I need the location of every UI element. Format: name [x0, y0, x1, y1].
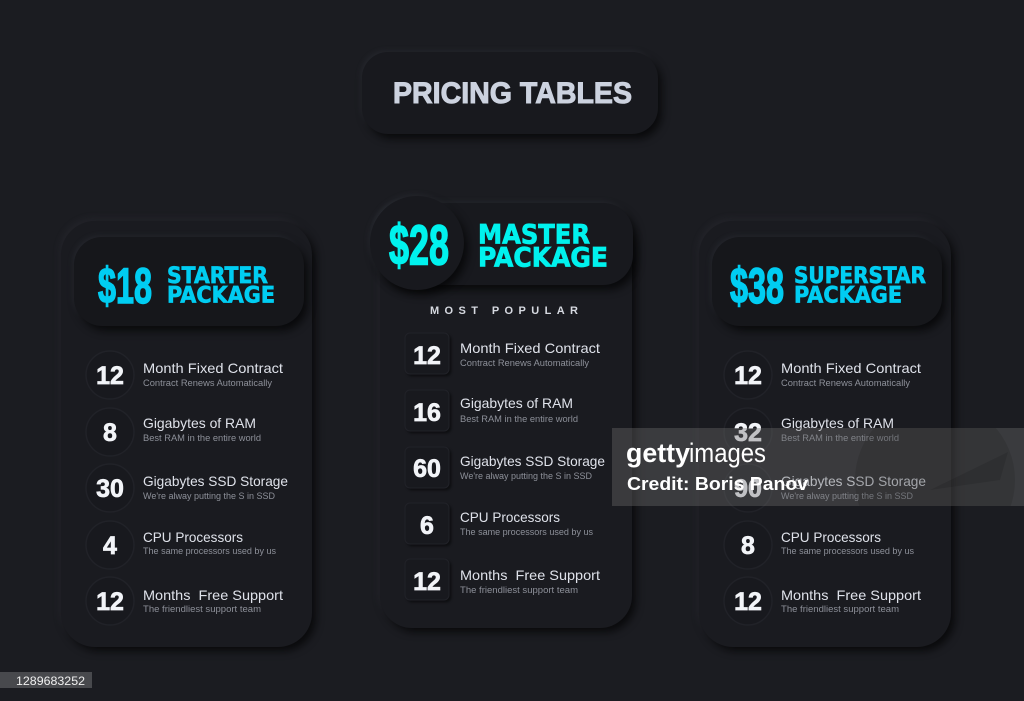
starter header: $18 [98, 258, 152, 314]
image id label: 1289683252 [16, 676, 85, 688]
watermark [612, 428, 1024, 506]
superstar rows: Gigabytes SSD Storage [781, 473, 926, 489]
starter header [74, 237, 304, 326]
watermark: images [689, 438, 766, 468]
superstar rows: Month Fixed Contract [781, 360, 921, 376]
superstar rows: 12 [734, 362, 762, 390]
starter rows: The friendliest support team [143, 604, 261, 614]
superstar header: PACKAGE [794, 284, 902, 308]
superstar header: $38 [730, 258, 784, 314]
starter rows: CPU Processors [143, 529, 243, 545]
superstar rows: Gigabytes of RAM [781, 415, 894, 431]
master rows: 12 [413, 342, 441, 370]
panel: superstar [699, 221, 951, 647]
master rows: Months Free Support [460, 567, 600, 583]
superstar rows: Best RAM in the entire world [781, 433, 899, 443]
master rows: Contract Renews Automatically [460, 358, 590, 368]
starter rows: Gigabytes SSD Storage [143, 473, 288, 489]
starter rows: The same processors used by us [143, 546, 277, 556]
starter rows: Month Fixed Contract [143, 360, 283, 376]
superstar rows: 8 [741, 532, 755, 560]
master header [370, 196, 633, 290]
watermark: getty [626, 438, 690, 468]
master header: PACKAGE [478, 242, 608, 274]
title pill [362, 52, 658, 134]
panel: master [370, 196, 633, 628]
master rows: The same processors used by us [460, 527, 594, 537]
superstar rows [724, 351, 926, 625]
master rows: Gigabytes SSD Storage [460, 453, 605, 469]
master rows: 16 [413, 399, 441, 427]
starter rows: 8 [103, 419, 117, 447]
starter rows: Gigabytes of RAM [143, 415, 256, 431]
superstar rows: Contract Renews Automatically [781, 378, 911, 388]
starter rows: Months Free Support [143, 587, 283, 603]
most popular label: MOST POPULAR [430, 305, 578, 317]
superstar rows: We're alway putting the S in SSD [781, 491, 913, 501]
superstar rows: 90 [734, 475, 762, 503]
master rows: Month Fixed Contract [460, 340, 600, 356]
master rows: We're alway putting the S in SSD [460, 471, 592, 481]
master header: MASTER [478, 220, 590, 250]
starter rows: Best RAM in the entire world [143, 433, 261, 443]
panel: starter [61, 221, 312, 647]
starter header: PACKAGE [167, 284, 275, 308]
starter header: STARTER [167, 264, 268, 289]
master header: $28 [389, 214, 449, 278]
superstar rows: The same processors used by us [781, 546, 915, 556]
starter rows: 30 [96, 475, 124, 503]
starter rows: 4 [103, 532, 117, 560]
starter rows: Contract Renews Automatically [143, 378, 273, 388]
watermark: Credit: Boris Panov [627, 474, 808, 494]
master rows: The friendliest support team [460, 585, 578, 595]
superstar rows: CPU Processors [781, 529, 881, 545]
superstar header [712, 237, 942, 326]
superstar rows: 32 [734, 419, 762, 447]
master rows: CPU Processors [460, 509, 560, 525]
master rows: Best RAM in the entire world [460, 414, 578, 424]
starter rows: 12 [96, 588, 124, 616]
starter rows [86, 351, 288, 625]
superstar rows: The friendliest support team [781, 604, 899, 614]
master rows: 6 [420, 512, 434, 540]
superstar header: SUPERSTAR [794, 264, 926, 289]
image id label [0, 672, 92, 688]
master rows: 60 [413, 455, 441, 483]
master rows: Gigabytes of RAM [460, 395, 573, 411]
master rows: 12 [413, 568, 441, 596]
master rows [405, 333, 605, 600]
starter rows: 12 [96, 362, 124, 390]
superstar rows: Months Free Support [781, 587, 921, 603]
superstar rows: 12 [734, 588, 762, 616]
starter rows: We're alway putting the S in SSD [143, 491, 275, 501]
title pill: PRICING TABLES [393, 77, 632, 110]
